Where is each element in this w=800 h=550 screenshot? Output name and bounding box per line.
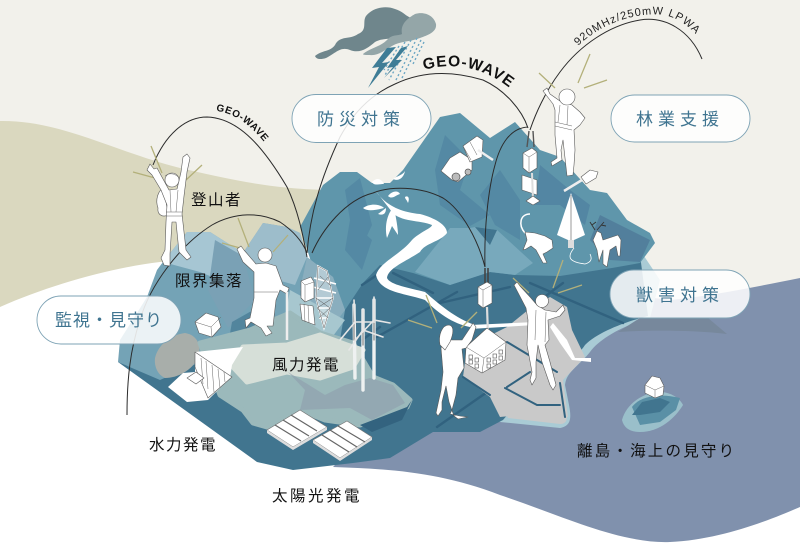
callout: monitoring [37, 296, 181, 344]
callout: disaster prevention [292, 94, 431, 142]
wind turbines [340, 297, 390, 390]
label: hydro power: 水力発電 [149, 436, 217, 454]
city roads over district [463, 342, 565, 417]
arc label big GEO-WAVE: GEO-WAVE [423, 56, 515, 88]
callout: wildlife damage [610, 270, 750, 318]
waterfall splash [363, 171, 409, 238]
lower hills [200, 313, 412, 432]
device: gateway by tower [300, 277, 315, 325]
building [465, 328, 506, 373]
icon: monkey [521, 214, 553, 263]
city roads [362, 273, 623, 427]
house in village [195, 313, 221, 337]
left pale mountain [118, 223, 345, 380]
main mountain range [300, 113, 655, 310]
icon: forestry machine [441, 136, 493, 182]
device: LPWA unit on building [478, 268, 492, 335]
icon: tree [557, 193, 585, 248]
figure: woman [436, 323, 476, 419]
arc label frequency: 920MHz/250mW LPWA [574, 6, 699, 45]
rays [133, 54, 607, 328]
label: solar power: 太陽光発電 [272, 487, 362, 505]
icon: deer [570, 222, 621, 267]
icon: chainsaw [564, 170, 598, 191]
figure: climber [147, 154, 191, 266]
background: sea [333, 278, 800, 542]
figure: elderly villager [237, 246, 289, 340]
figure: man [514, 282, 565, 390]
river [375, 190, 591, 362]
dam [168, 347, 243, 402]
transmission tower [313, 266, 336, 328]
figure: forester [543, 88, 585, 176]
island [622, 376, 683, 432]
arc label small GEO-WAVE: GEO-WAVE [217, 104, 269, 142]
callout: disaster prevention: 防災対策 [317, 110, 405, 129]
background: white ground [0, 250, 800, 550]
callout: wildlife damage: 獣害対策 [636, 286, 724, 305]
callout: forestry support: 林業支援 [636, 110, 724, 129]
solar panels [267, 410, 372, 461]
label: climbers: 登山者 [191, 191, 242, 209]
device: forest sensor [522, 131, 540, 205]
callout: forestry support [611, 95, 750, 142]
callout: monitoring: 監視・見守り [55, 311, 163, 330]
label: depopulated villages: 限界集落 [175, 272, 243, 290]
land base with coast [118, 250, 660, 470]
city district [463, 297, 585, 417]
storm clouds [315, 7, 436, 88]
background: khaki band [0, 121, 340, 320]
label: wind power: 風力発電 [272, 356, 340, 374]
callout shadow on sea [618, 318, 727, 334]
label: island and sea monitoring: 離島・海上の見守り [577, 442, 736, 460]
rocky gorge [155, 333, 199, 378]
arcs: GEO-WAVE links [127, 19, 702, 415]
